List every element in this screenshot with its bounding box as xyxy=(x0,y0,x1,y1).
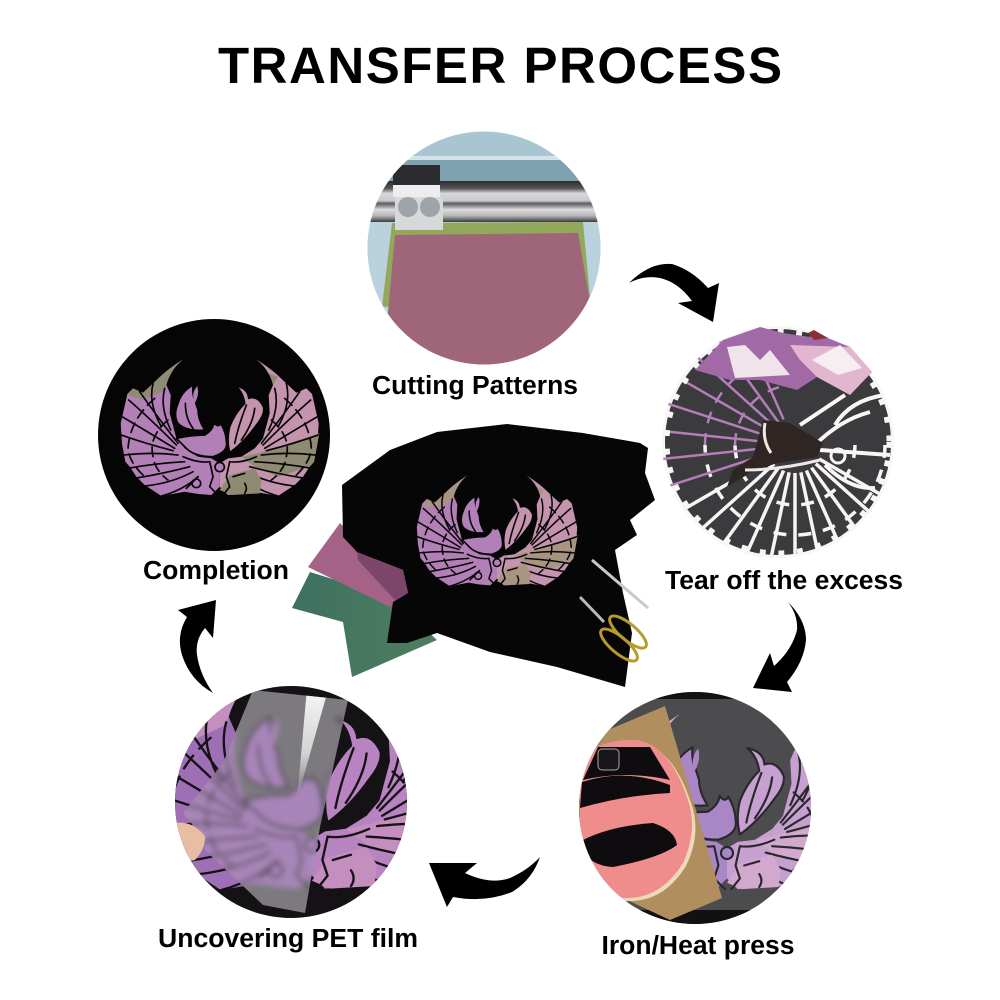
white weed lines, lower wing xyxy=(686,445,887,555)
phoenix on fabric xyxy=(670,714,811,890)
dark weeded design xyxy=(665,329,891,555)
step 3 photo: iron / heat press xyxy=(579,692,811,924)
step 2 label: Tear off the excess xyxy=(665,567,903,595)
gold scissors xyxy=(580,597,651,666)
step 1 label: Cutting Patterns xyxy=(372,372,578,400)
step 3 label: Iron/Heat press xyxy=(602,932,794,960)
maroon vinyl sheet xyxy=(388,233,590,364)
black t-shirt xyxy=(342,424,655,687)
heat press plate xyxy=(580,740,695,901)
peeled backing film corner xyxy=(695,327,872,395)
purple weed lines, upper wing xyxy=(662,330,785,486)
arrow: step 2 to step 3 xyxy=(753,602,806,692)
step 1 photo: cutting machine xyxy=(368,132,600,364)
arrow: step 3 to step 4 xyxy=(429,857,540,907)
title: TRANSFER PROCESS xyxy=(218,37,782,94)
step 2 photo: tear off the excess xyxy=(662,326,894,558)
pink film sheet xyxy=(308,523,408,607)
film glare xyxy=(298,696,326,794)
white rim gaps and tail lines xyxy=(665,329,891,555)
arrow: step 4 to step 5 xyxy=(178,600,216,693)
step 4 label: Uncovering PET film xyxy=(158,925,418,953)
arrow: step 1 to step 2 xyxy=(629,264,719,322)
center photo: t-shirt with film sheets and tools xyxy=(292,424,655,687)
finger xyxy=(177,822,206,861)
step 4 photo: uncovering PET film xyxy=(175,686,407,918)
exposed shirt xyxy=(727,420,823,487)
machine rails xyxy=(360,181,610,222)
cardboard xyxy=(575,706,722,920)
green film sheet xyxy=(292,572,437,677)
PET film covering xyxy=(183,690,348,913)
tweezers xyxy=(592,560,648,608)
step 5 photo: completion xyxy=(98,319,330,551)
cutter carriage xyxy=(393,165,443,230)
step 5 label: Completion xyxy=(143,557,289,585)
green cutting mat xyxy=(382,222,590,307)
phoenix print on shirt xyxy=(417,475,578,586)
phoenix, sharp xyxy=(175,700,407,890)
